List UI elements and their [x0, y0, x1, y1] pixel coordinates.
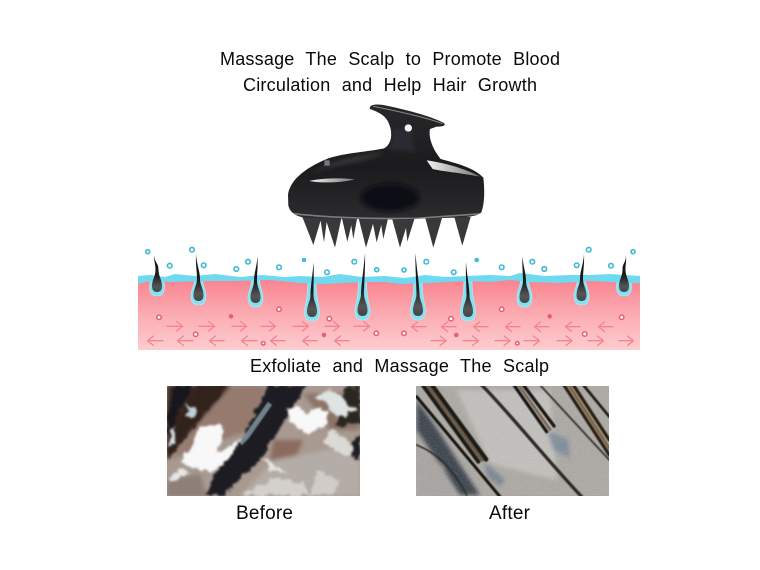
title: Massage The Scalp to Promote Blood: [220, 49, 560, 69]
hair scale streak: [240, 403, 270, 443]
photo: after, clean scalp: [416, 385, 609, 497]
heading: exfoliate: Exfoliate and Massage The Scalp: [250, 356, 549, 376]
blood cells: [157, 307, 624, 345]
skin grain: [416, 385, 609, 495]
follicle halos: [150, 278, 632, 321]
hair strands: [417, 385, 609, 497]
skin layer: [138, 280, 640, 350]
title: Circulation and Help Hair Growth: [243, 75, 537, 95]
label: before: Before: [236, 503, 293, 524]
diagram: scalp skin cross-section: [138, 247, 640, 350]
photo: before, flaky scalp: [167, 385, 360, 497]
label: after: After: [489, 503, 531, 524]
brush highlights: [291, 106, 482, 219]
circulation arrows: [148, 322, 634, 346]
scalp tones: [417, 390, 570, 495]
oxygen bubbles: [146, 247, 635, 275]
icon: scalp massage brush: [288, 104, 484, 248]
dark hairs: [167, 385, 360, 495]
hair strands: [152, 253, 629, 317]
white flakes: [168, 390, 357, 495]
blue surface band: [138, 273, 640, 284]
title: [220, 49, 560, 95]
scalp tones: [167, 385, 360, 497]
brush body: [288, 104, 484, 220]
brush teeth: [302, 217, 471, 248]
